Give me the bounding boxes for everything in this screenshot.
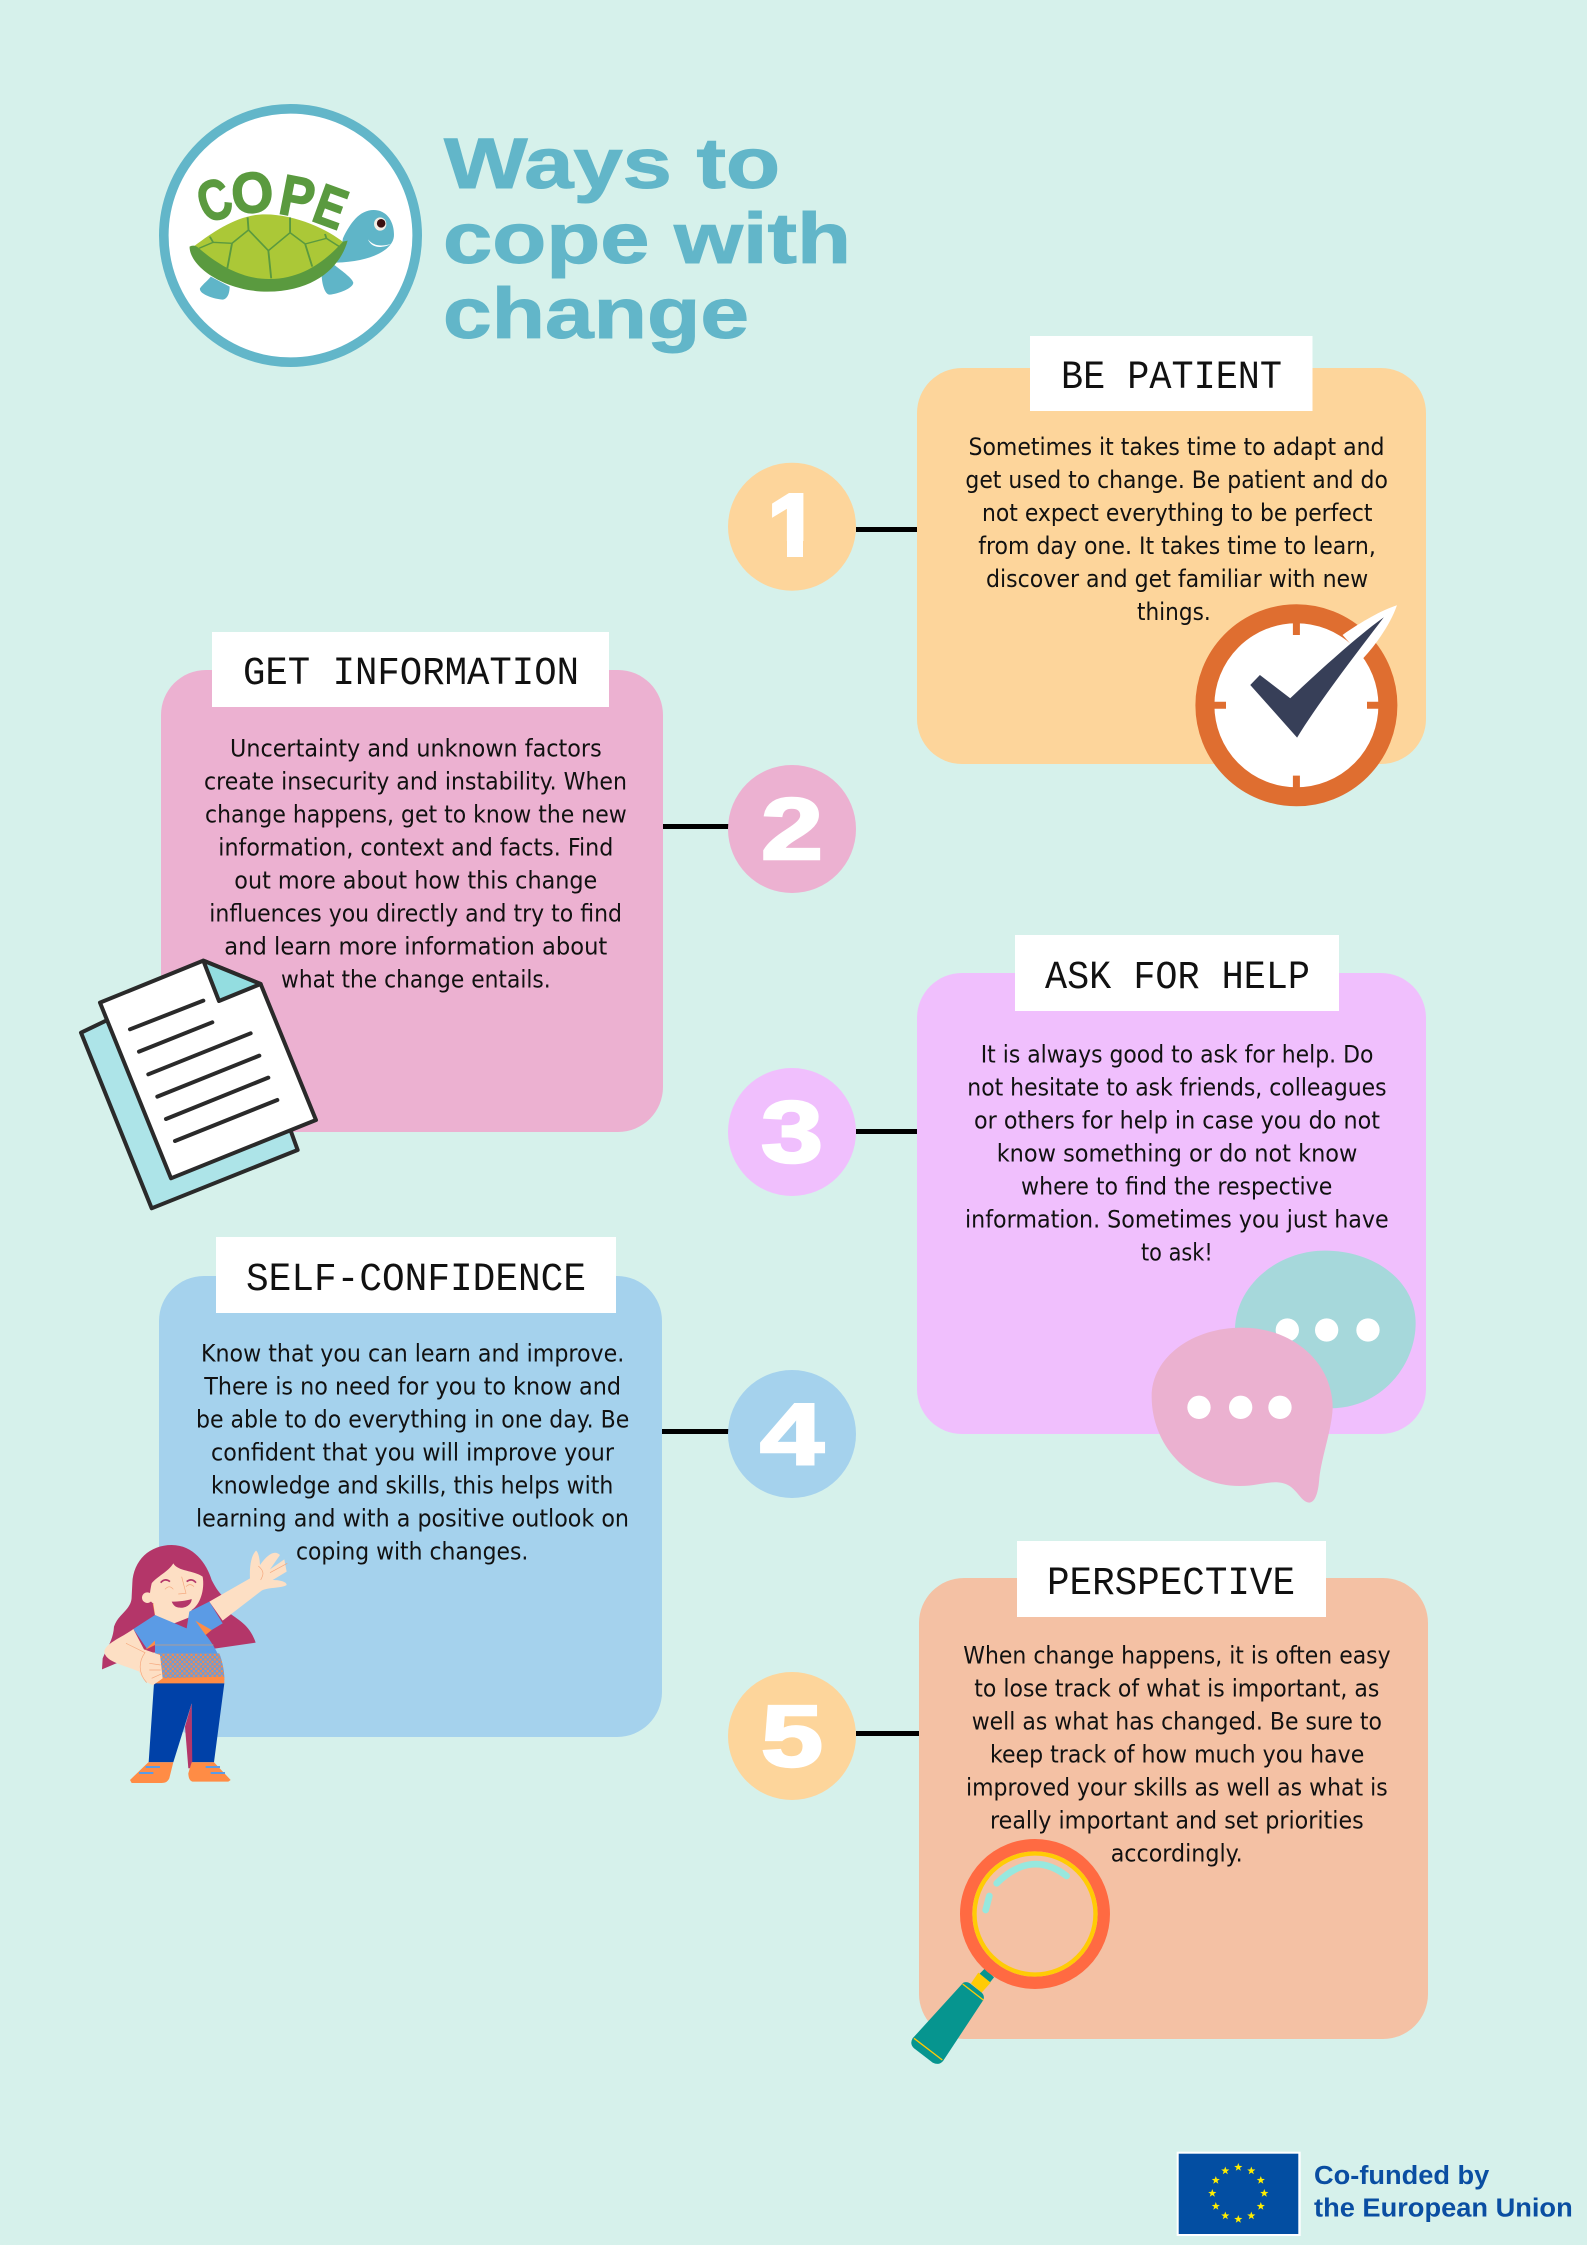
step number 1: [728, 463, 856, 591]
text: perspective: to lose track of what is important, as: [974, 1674, 1379, 1702]
icon: magnifying glass: [911, 1845, 1104, 2064]
text: get information: Uncertainty and unknown factors: [230, 735, 602, 763]
text: perspective: [963, 1641, 1391, 1867]
text: be patient: things.: [1137, 598, 1211, 626]
text: perspective: When change happens, it is often easy: [963, 1641, 1391, 1669]
text: ask for help: information. Sometimes you just have: [965, 1205, 1389, 1233]
step number 5: 5: [761, 1688, 823, 1785]
text: get information: out more about how this change: [234, 867, 597, 895]
connector 3: [856, 1129, 918, 1134]
text: self-confidence: confident that you will improve your: [211, 1439, 614, 1467]
text: be patient: from day one. It takes time to learn,: [978, 532, 1376, 560]
logo wordmark: COPE: C: [189, 165, 241, 236]
text: ask for help: It is always good to ask for help. Do: [981, 1040, 1373, 1068]
text: self-confidence: coping with changes.: [296, 1538, 528, 1566]
icon: documents: [81, 961, 316, 1208]
text: self-confidence: learning and with a positive outlook on: [196, 1505, 629, 1533]
text: be patient: discover and get familiar with new: [986, 565, 1368, 593]
title: Ways to: [444, 125, 780, 204]
text: get information: change happens, get to know the new: [205, 801, 627, 829]
text: ask for help: [965, 1040, 1389, 1266]
logo wordmark: COPE: E: [306, 172, 356, 242]
step number 4: 4: [760, 1386, 824, 1483]
logo wordmark: COPE: O: [229, 160, 276, 227]
heading: self-confidence: [216, 1237, 616, 1313]
step number 2: 2: [761, 781, 823, 878]
EU co-funded logo: [1177, 2152, 1573, 2236]
logo: COPE turtle: [164, 109, 417, 362]
panel: ask for help: [917, 935, 1426, 1503]
heading: get information: GET INFORMATION: [243, 652, 579, 697]
text: perspective: really important and set priorities: [990, 1806, 1364, 1834]
text: be patient: Sometimes it takes time to adapt and: [968, 433, 1384, 461]
logo wordmark: COPE: [189, 160, 356, 242]
text: self-confidence: [196, 1340, 629, 1566]
text: self-confidence: Know that you can learn and improve.: [201, 1340, 624, 1368]
text: self-confidence: knowledge and skills, this helps with: [211, 1472, 613, 1500]
step number 4: [728, 1370, 856, 1498]
title: [443, 125, 851, 354]
co-funded text: the European Union: [1314, 2195, 1573, 2223]
connector 2: [662, 824, 729, 829]
text: be patient: not expect everything to be perfect: [982, 499, 1372, 527]
title: cope with: [443, 200, 851, 279]
panel: get information: [81, 632, 663, 1208]
panel: perspective: [911, 1541, 1428, 2064]
text: ask for help: to ask!: [1141, 1238, 1213, 1266]
text: get information: influences you directly and try to find: [209, 900, 622, 928]
illustration: waving girl: [102, 1545, 287, 1783]
panel: be patient: [917, 336, 1426, 797]
heading: self-confidence: SELF-CONFIDENCE: [246, 1258, 586, 1303]
connector 1: [856, 527, 918, 532]
text: ask for help: know something or do not know: [997, 1139, 1357, 1167]
heading: be patient: BE PATIENT: [1061, 356, 1282, 401]
icon: clock with check mark: [1205, 605, 1397, 797]
heading: perspective: PERSPECTIVE: [1047, 1562, 1295, 1607]
co-funded text: Co-funded by: [1314, 2162, 1490, 2190]
logo wordmark: COPE: P: [275, 163, 320, 232]
text: perspective: improved your skills as well as what is: [966, 1773, 1388, 1801]
icon: speech bubbles: [1152, 1251, 1416, 1503]
text: ask for help: or others for help in case you do not: [974, 1106, 1380, 1134]
text: perspective: keep track of how much you have: [990, 1740, 1364, 1768]
text: perspective: accordingly.: [1111, 1839, 1243, 1867]
heading: perspective: [1017, 1541, 1326, 1617]
step number 5: [728, 1672, 856, 1800]
connector 4: [661, 1429, 729, 1434]
text: get information: and learn more information about: [224, 933, 607, 961]
text: self-confidence: be able to do everything in one day. Be: [196, 1406, 629, 1434]
step number 1: 1: [768, 477, 818, 574]
step number 2: [728, 765, 856, 893]
heading: get information: [212, 632, 609, 707]
connector 5: [856, 1731, 919, 1736]
text: ask for help: where to find the respective: [1021, 1172, 1332, 1200]
heading: ask for help: [1015, 935, 1339, 1011]
text: perspective: well as what has changed. Be sure to: [972, 1707, 1382, 1735]
turtle illustration: [190, 210, 394, 300]
text: ask for help: not hesitate to ask friends, colleagues: [967, 1073, 1387, 1101]
text: get information: [204, 735, 627, 994]
panel: self-confidence: [102, 1237, 662, 1783]
step number 3: [728, 1068, 856, 1196]
text: self-confidence: There is no need for you to know and: [203, 1373, 621, 1401]
text: be patient: [965, 433, 1388, 626]
heading: ask for help: ASK FOR HELP: [1045, 956, 1310, 1001]
title: change: [443, 275, 749, 354]
text: be patient: get used to change. Be patient and do: [965, 466, 1388, 494]
EU flag: [1177, 2152, 1301, 2236]
text: get information: information, context and facts. Find: [218, 834, 613, 862]
text: get information: what the change entails.: [281, 966, 551, 994]
co-funded text: [1314, 2162, 1573, 2223]
text: get information: create insecurity and instability. When: [204, 768, 627, 796]
step number 3: 3: [761, 1084, 823, 1181]
heading: be patient: [1030, 336, 1312, 411]
